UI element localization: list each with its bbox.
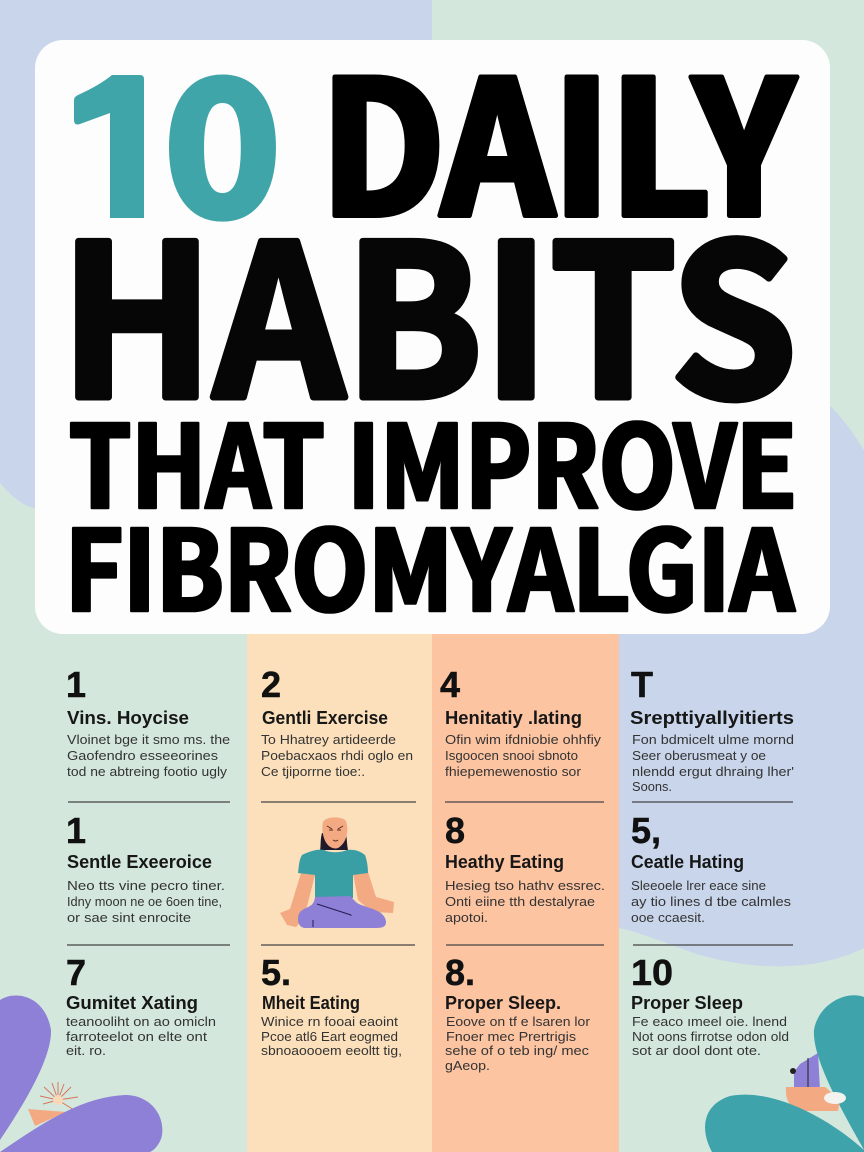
habit: column 1 row 3: farroteelot on elte ont xyxy=(66,1029,207,1044)
habit: column 2 row 1: Ce tjiporrne tioe:. xyxy=(261,764,365,779)
habit: column 1 row 1: 1 xyxy=(66,664,86,705)
title line 1 xyxy=(60,0,795,270)
title line 1: 0 xyxy=(164,0,281,270)
habit: column 1 row 2: Sentle Exeeroice xyxy=(67,852,212,872)
habit: column 3 row 1: 4 xyxy=(440,664,460,705)
illustration: seated meditating person xyxy=(280,817,394,928)
habit: column 1 row 2 xyxy=(66,810,225,925)
habit: column 1 row 1 xyxy=(66,664,230,779)
habit: column 1 row 3: eit. ro. xyxy=(66,1043,106,1058)
habit: column 2 row 3 xyxy=(261,952,402,1058)
icon: peach triangle xyxy=(28,1109,66,1126)
habit: column 3 row 3: Eoove on tf e lsaren lor xyxy=(446,1014,591,1029)
habit: column 4 row 3: Proper Sleep xyxy=(631,993,743,1013)
habit: column 4 row 3: 10 xyxy=(631,952,673,993)
habit: column 3 row 3: Proper Sleep. xyxy=(445,993,561,1013)
habit: column 1 row 3: Gumitet Xating xyxy=(66,993,198,1013)
habit: column 4 row 1: Soons. xyxy=(632,779,672,794)
habit: column 1 row 3: 7 xyxy=(66,952,86,993)
habit: column 4 row 1: Srepttiyallyitierts xyxy=(630,708,794,728)
habit: column 4 row 3: sot ar dool dont ote. xyxy=(632,1043,761,1058)
hair xyxy=(320,833,348,850)
title card xyxy=(35,0,830,644)
habit: column 2 row 1: To Hhatrey artideerde xyxy=(261,732,396,747)
habit: column 2 row 3: Pcoe atl6 Eart eogmed xyxy=(261,1029,398,1044)
habit: column 4 row 1: Fon bdmicelt ulme mornd xyxy=(632,732,794,747)
habit: column 3 row 1 xyxy=(440,664,602,779)
habit: column 4 row 2: Sleeoele lrer eace sine xyxy=(631,878,766,893)
title line 2: HABITS xyxy=(60,154,797,458)
habit: column 4 row 2 xyxy=(631,810,792,925)
icon: purple book and peach hand xyxy=(786,1053,846,1111)
habit: column 4 row 2: ay tio lines d tbe calmles xyxy=(631,894,792,909)
title line 4: FIBROMYALGIA xyxy=(65,482,795,644)
right arm xyxy=(353,872,394,913)
habit: column 4 row 1 xyxy=(630,664,794,794)
habit: column 1 row 1: tod ne abtreing footio ugly xyxy=(67,764,228,779)
habit: column 1 row 3 xyxy=(66,952,216,1058)
dividers row 1 xyxy=(68,801,793,803)
habit: column 1 row 3: teanooliht on ao omicln xyxy=(66,1014,216,1029)
left arm xyxy=(280,873,315,927)
habit: column 2 row 3: sbnoaoooem eeoltt tig, xyxy=(261,1043,402,1058)
habit: column 3 row 1: Ofin wim ifdniobie ohhfiy xyxy=(445,732,602,747)
habit: column 3 row 3: Fnoer mec Prertrigis xyxy=(446,1029,577,1044)
habit: column 1 row 2: Idny moon ne oe 6oen tine, xyxy=(67,894,222,909)
habit: column 3 row 3 xyxy=(445,952,591,1073)
habit: column 2 row 3: Mheit Eating xyxy=(262,993,360,1013)
habit: column 3 row 2: 8 xyxy=(445,810,465,851)
habit: column 3 row 2 xyxy=(445,810,605,925)
habit: column 2 row 1: 2 xyxy=(261,664,281,705)
dividers row 2 xyxy=(67,944,793,946)
title line 1: DAILY xyxy=(321,0,795,270)
habit: column 4 row 2: Ceatle Hating xyxy=(631,852,744,872)
title line 1: 1 xyxy=(62,0,171,270)
habit: column 3 row 2: Heathy Eating xyxy=(445,852,564,872)
habit: column 2 row 1 xyxy=(261,664,413,779)
habit: column 4 row 3 xyxy=(631,952,789,1058)
habit: column 1 row 2: or sae sint enrocite xyxy=(67,910,191,925)
icon: sunburst xyxy=(40,1082,78,1110)
habit: column 2 row 1: Poebacxaos rhdi oglo en xyxy=(261,748,413,763)
decorative blobs and object, bottom right xyxy=(705,995,864,1152)
habit: column 4 row 2: ooe ccaesit. xyxy=(631,910,705,925)
habit: column 3 row 3: sehe of o teb ing/ mec xyxy=(445,1043,590,1058)
habit: column 4 row 1: Seer oberusmeat y oe xyxy=(632,748,766,763)
habit: column 3 row 2: apotoi. xyxy=(445,910,488,925)
habit: column 4 row 3: Not oons firrotse odon old xyxy=(632,1029,789,1044)
head xyxy=(322,817,347,848)
habit: column 3 row 1: fhiepemewenostio sor xyxy=(445,764,582,779)
habit: column 4 row 3: Fe eaco ımeel oie. lnend xyxy=(632,1014,787,1029)
habit: column 1 row 2: Neo tts vine pecro tiner. xyxy=(67,878,225,893)
shirt xyxy=(298,850,368,898)
habit: column 3 row 3: 8. xyxy=(445,952,475,993)
habit: column 3 row 2: Onti eiine tth destalyrae xyxy=(445,894,595,909)
habit: column 2 row 3: 5. xyxy=(261,952,291,993)
habit: column 4 row 2: 5, xyxy=(631,810,661,851)
decorative blobs, bottom left xyxy=(0,995,162,1152)
habit: column 1 row 1: Vloinet bge it smo ms. the xyxy=(67,732,230,747)
habit: column 3 row 1: Isgoocen snooi sbnoto xyxy=(445,748,578,763)
habit: column 1 row 2: 1 xyxy=(66,810,86,851)
habit: column 1 row 1: Gaofendro esseeorines xyxy=(67,748,219,763)
habit: column 2 row 1: Gentli Exercise xyxy=(262,708,388,728)
crossed legs xyxy=(298,896,386,928)
habit: column 1 row 1: Vins. Hoycise xyxy=(67,708,189,728)
habit: column 4 row 1: T xyxy=(631,664,653,705)
habit: column 3 row 2: Hesieg tso hathv essrec. xyxy=(445,878,605,893)
habit: column 3 row 3: gAeop. xyxy=(445,1058,490,1073)
habit: column 3 row 1: Henitatiy .lating xyxy=(445,708,582,728)
habit: column 4 row 1: nlendd ergut dhraing lher' xyxy=(632,764,794,779)
habit: column 2 row 3: Winice rn fooai eaoint xyxy=(261,1014,398,1029)
